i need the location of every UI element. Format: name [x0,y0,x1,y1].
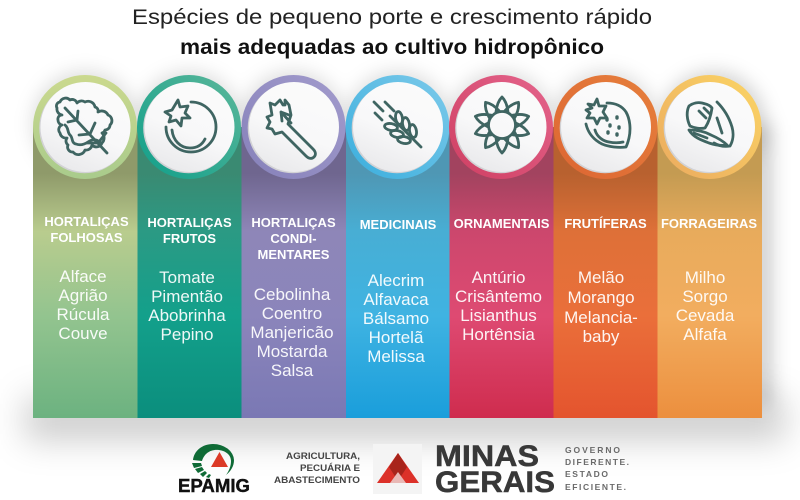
heading: FRUTOS [163,231,216,246]
icon: strawberry [586,99,630,147]
species list: Rúcula [57,305,110,324]
heading: FOLHOSAS [50,230,123,245]
heading: HORTALIÇAS [251,215,336,230]
icon: lettuce leaf [56,98,112,155]
heading: FORRAGEIRAS [661,216,757,231]
icon: wheat [374,102,421,147]
panel: frutíferas [554,75,658,418]
panel: ornamentais [449,75,554,418]
species list: Coentro [262,304,322,323]
heading: FRUTÍFERAS [564,216,647,231]
slogan: DIFERENTE. [565,457,629,467]
species list: Morango [567,288,635,307]
species list: Hortênsia [462,325,535,344]
panel: hortaliças condimentares [242,75,346,418]
logo: EPAMIG [178,444,250,496]
species list: Crisântemo [455,287,542,306]
species list: Tomate [159,268,215,287]
icon: corn [687,102,733,146]
species list: Pimentão [151,287,223,306]
species list: Couve [58,324,108,343]
icon: sunflower [474,97,530,153]
panel: hortaliças frutos [137,75,242,418]
title [132,6,652,59]
heading: HORTALIÇAS [147,215,232,230]
side and circle shadows [32,71,772,405]
species list: Cevada [676,306,735,325]
icon: asparagus [267,100,315,158]
species list: Bálsamo [363,309,429,328]
icon: tomato [165,100,216,152]
wordmark: Minas Gerais: MINAS [435,440,539,473]
bottom shadow of the columns [25,398,785,440]
species list: Melão [578,268,624,287]
slogan: ESTADO [565,469,608,479]
species list: Salsa [271,361,314,380]
species list: Melancia- [564,308,638,327]
heading: HORTALIÇAS [44,214,129,229]
panel: forrageiras [658,75,762,418]
text: agriculture secretariat: PECUÁRIA E [300,463,360,474]
species list: Abobrinha [148,306,226,325]
species list: Sorgo [682,287,728,306]
slogan: EFICIENTE. [565,482,626,492]
slogan [565,445,629,492]
slogan: GOVERNO [565,445,620,455]
logo: EPAMIG: EPAMIG [178,476,250,496]
species list: Milho [685,268,725,287]
text: agriculture secretariat: AGRICULTURA, [286,451,360,462]
species list: Alface [59,267,107,286]
species list: Antúrio [472,268,525,287]
species list: Agrião [58,286,108,305]
heading: CONDI- [270,231,317,246]
species list: Mostarda [257,342,328,361]
heading: MENTARES [258,247,330,262]
species list: baby [583,327,620,346]
heading: ORNAMENTAIS [454,216,550,231]
text: agriculture secretariat [274,451,360,486]
title: mais adequadas ao cultivo hidropônico [180,36,604,59]
species list: Manjericão [250,323,334,342]
species list: Cebolinha [254,285,331,304]
species list: Hortelã [369,328,424,347]
species list: Alfafa [683,325,727,344]
title: Espécies de pequeno porte e crescimento rápido [132,6,652,29]
heading: MEDICINAIS [360,217,437,232]
species list: Pepino [161,325,213,344]
panel: hortaliças folhosas [33,75,138,418]
logo: Minas Gerais red triangle [373,444,422,494]
wordmark: Minas Gerais: GERAIS [435,466,555,499]
species list: Alfavaca [363,290,429,309]
species list: Lisianthus [460,306,537,325]
species list: Alecrim [368,271,424,290]
panel: medicinais [346,75,450,418]
species list: Melissa [367,347,425,366]
wordmark: Minas Gerais [435,440,555,499]
text: agriculture secretariat: ABASTECIMENTO [274,475,360,486]
